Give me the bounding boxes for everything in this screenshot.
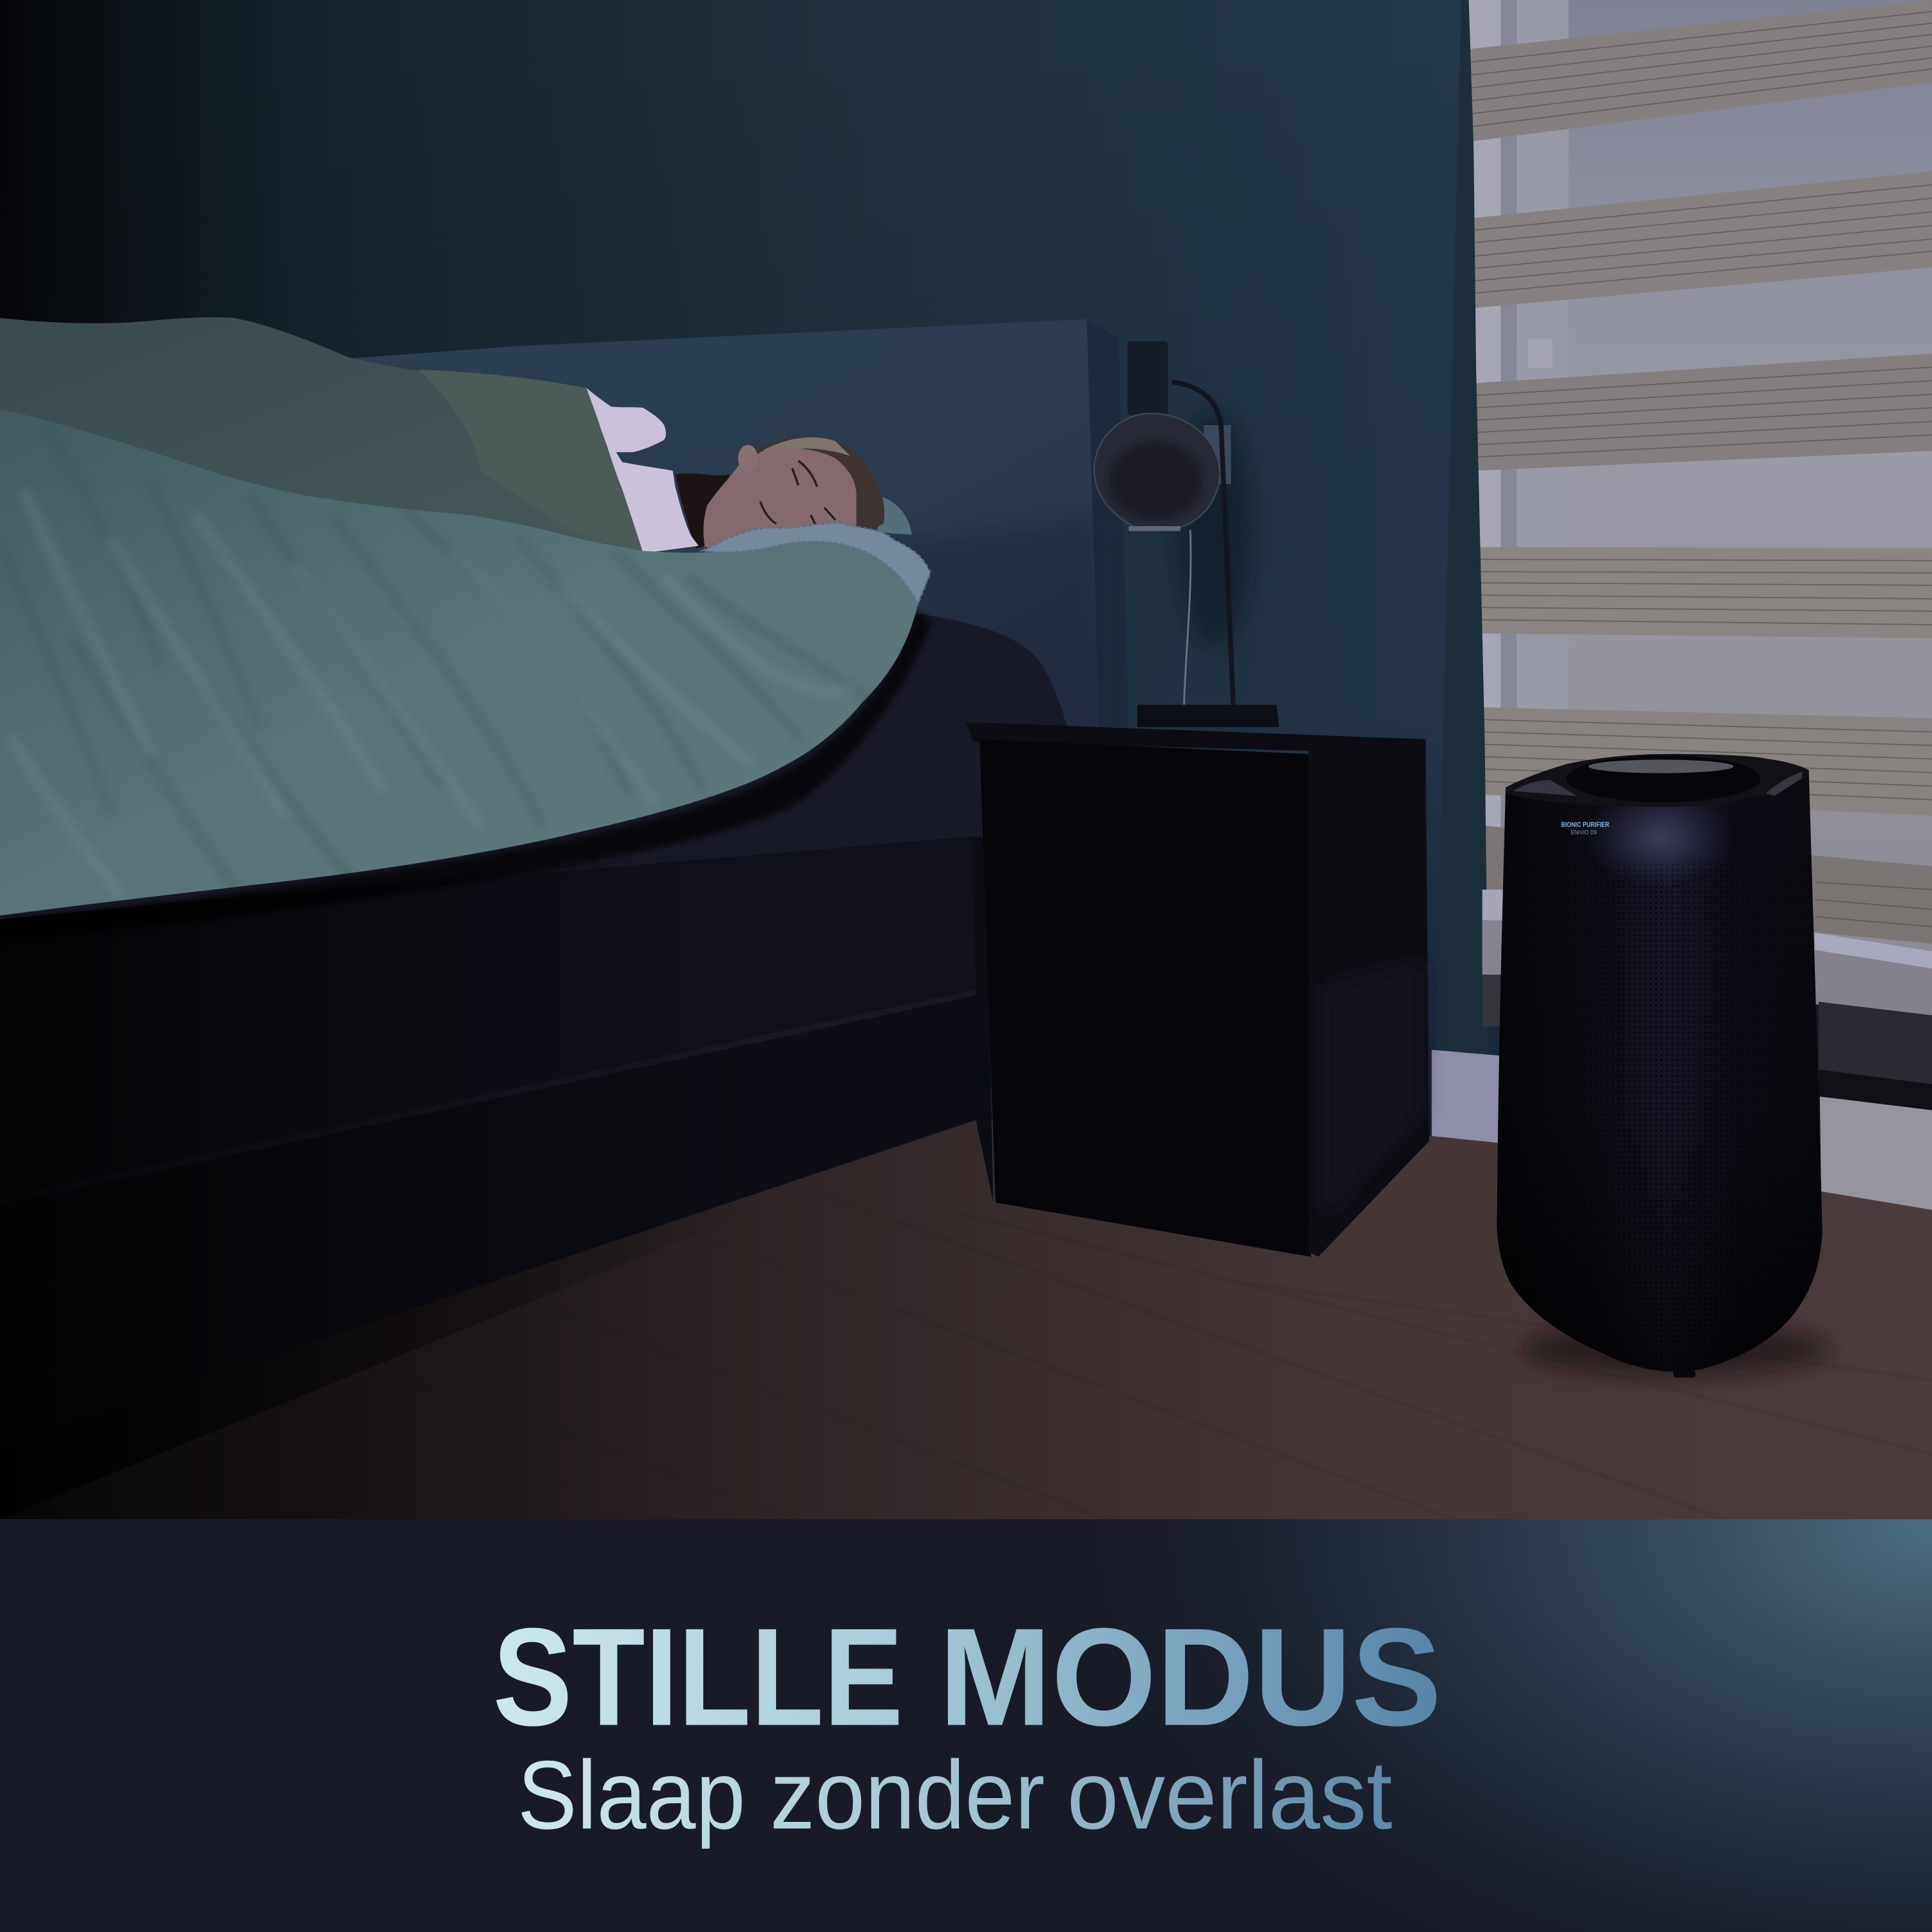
table lamp	[1094, 341, 1279, 727]
subtitle: Slaap	[518, 1741, 746, 1850]
ear	[738, 445, 758, 472]
white shirt	[587, 388, 699, 553]
skirting left of purifier	[1432, 1050, 1503, 1144]
subtitle: overlast	[1067, 1741, 1392, 1850]
subtitle: zonder	[770, 1741, 1045, 1850]
purifier vents	[1513, 772, 1803, 796]
wall	[0, 0, 1510, 1183]
title: MODUS	[939, 1599, 1442, 1755]
glass globe	[1094, 413, 1220, 530]
front duvet	[0, 409, 931, 916]
subtitle	[518, 1741, 1392, 1850]
mattress with fitted sheet	[0, 614, 1067, 924]
lamp arm	[1172, 382, 1233, 707]
bed base	[0, 610, 993, 1519]
hair	[739, 436, 884, 542]
lamp base	[1137, 705, 1279, 727]
pillow	[877, 497, 912, 535]
purifier shadow	[1522, 1322, 1830, 1376]
purifier grille	[1491, 752, 1836, 1392]
neck hair	[675, 473, 730, 548]
window sill, rail and skirting right	[1482, 889, 1932, 1210]
headboard	[333, 319, 1129, 727]
wall edge beside window	[1440, 0, 1488, 986]
purifier body	[1497, 754, 1823, 1372]
purifier foot	[1673, 1370, 1696, 1378]
face	[703, 448, 857, 548]
purifier top disc	[1566, 755, 1761, 802]
title: STILLE	[493, 1599, 903, 1755]
photo: bedroom scene	[0, 0, 1932, 1519]
lamp top cylinder	[1128, 341, 1168, 415]
duvet fringe	[703, 522, 931, 604]
purifier model label: ENIVIO D9	[1571, 829, 1597, 835]
air purifier	[1491, 752, 1836, 1392]
back blanket	[0, 317, 643, 567]
floor	[0, 1120, 1932, 1519]
duvet wrinkles	[0, 431, 875, 900]
title	[493, 1599, 1442, 1755]
purifier brand label: BIONIC PURIFIER	[1561, 821, 1609, 829]
lamp shadow	[1177, 413, 1251, 647]
bottom caption panel	[0, 1519, 1932, 1932]
purifier top rim	[1506, 754, 1809, 807]
wall socket	[1204, 425, 1231, 484]
folded blanket edge	[419, 370, 643, 552]
closed eyes and mouth	[760, 461, 835, 530]
window with zebra blinds	[1466, 0, 1932, 986]
nightstand	[966, 722, 1429, 1257]
lamp cord	[1184, 530, 1191, 705]
sleeping woman	[587, 388, 912, 553]
purifier display	[1588, 760, 1734, 773]
